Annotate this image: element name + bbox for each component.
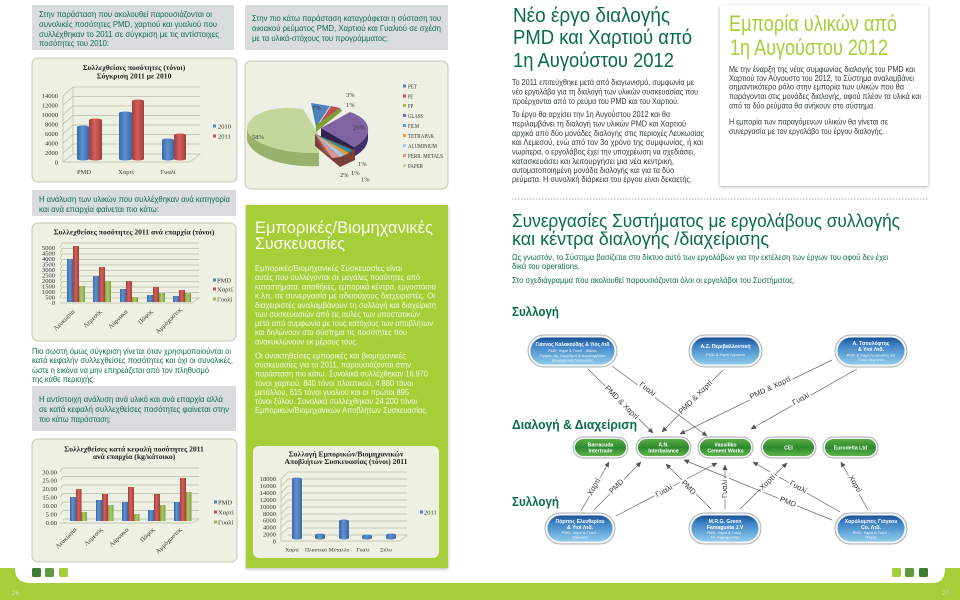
chart: composition pie [245,61,448,189]
chart: collected 2011 by district: 1500 [42,284,55,290]
text block: per capita note: κατά κεφαλήν συλλεχθείσες ποσότητες και όχι οι συνολικές, [32,356,233,365]
heading: system partnerships: Συνεργασίες Συστήματος με εργολάβους συλλογής [512,211,900,231]
chart: collected 2011 by district: 2000 [42,278,55,285]
panel: breakdown intro: και ανά επαρχία φαίνεται πιο κάτω: [39,205,159,214]
body text: παράσταση πιο κάτω. Συνολικά συλλέχθηκαν 16.970 [255,370,429,378]
body text: παράγονται στις μονάδες διαλογής, αφού πλέον τα υλικά και [729,92,921,101]
chart: composition pie: 1% [346,102,355,109]
heading: sorting and management: Διαλογή & Διαχείριση [512,417,637,432]
body text: Χαρτιού τον Αύγουστο του 2012, το Σύστημα αναλαμβάνει [729,74,914,83]
node: Yiangou collector: PMD, Χαρτί & Γυαλί - [853,530,890,535]
node: MRG Green collector: Famagusta J.V [707,525,744,531]
chart: commercial packaging 2011: Ξύλο [380,548,392,554]
text block: new sorting project [512,78,704,184]
panel: breakdown intro: Η ανάλυση των υλικών που συλλέχθηκαν ανά κατηγορία [39,195,230,204]
diagram arrows [581,360,868,520]
panel: stream composition intro [245,5,448,50]
diagram arrows: Χαρτί [847,474,864,494]
chart: commercial packaging 2011: 4000 [263,524,276,532]
text block: new sorting project: νωρίτερα, ο εργολάβος έχει την υποχρέωση να σχεδιάσει, [512,148,695,156]
decorative squares right [892,568,928,577]
chart: composition pie: PP [408,103,413,110]
panel: commercial and industrial packaging [246,205,448,568]
text block: new sorting project: ρεύματα. Η συνολική διάρκεια του έργου είναι δεκαετής. [512,175,692,184]
chart: totals 2011 vs 2010: Συλλεχθείσες ποσότητες (τόνοι) [83,63,186,72]
panel: per capita intro: πιο κάτω παράσταση: [39,415,111,424]
chart: per capita 2011 by district: Λευκωσία [54,526,79,550]
node: Tsoulofti collector: Α. Τσουλόφτης [853,341,890,347]
node: Barracuda sorting centre: Intertrade [589,448,613,454]
diagram arrows: Γυαλί [720,480,729,498]
node: AZ environmental collector: PMD & Χαρτί Λεμεσού [706,352,745,357]
text block: per capita note: της κάθε περιοχής. [32,375,95,384]
diagram arrows: PMD & Χαρτί [603,384,641,421]
panel: intro totals: συνολικές ποσότητες PMD, χαρτιού και γυαλιού που [39,20,217,29]
chart: composition pie: TETRAPAK [408,133,434,140]
body text: αυτές που συλλέγονται σε μεγάλες ποσότητες από [255,273,421,282]
node: Eleftheriou collector: Λάρνακα [572,534,588,540]
chart: totals 2011 vs 2010: Γυαλί [160,169,176,176]
chart: collected 2011 by district [32,223,236,341]
diagram arrows: Γυαλί [654,483,674,499]
chart: collected 2011 by district: Συλλεχθείσες ποσότητες 2011 ανά επαρχία (τόνοι) [54,228,215,236]
chart: commercial packaging 2011: 18000 [260,476,276,483]
decorative squares left [32,568,68,577]
text block: new sorting project: προέρχονται από το ρεύμα του PMD και του Χαρτιού. [512,97,679,106]
node: CEI sorting centre [761,437,816,458]
diagram arrows: Χαρτί [585,476,602,497]
node: Yiangou collector: Co. Λτδ. [861,525,882,531]
diagram arrows: Γυαλί [788,478,809,495]
node: Barracuda sorting centre [573,437,628,458]
chart: per capita 2011 by district: Λεμεσός [83,526,105,548]
heading [255,218,433,253]
text block: per capita note: Πιο σωστή όμως σύγκριση γίνεται όταν χρησιμοποιούνται οι [32,347,231,356]
heading: Εμπορία υλικών από [729,11,897,36]
heading: system partnerships: και κέντρα διαλογής /διαχείρισης [512,229,769,249]
node: MRG Green collector [689,513,761,544]
node: MRG Green collector: M.R.G. Green [709,519,741,525]
panel: per capita intro [32,386,236,431]
chart: collected 2011 by district: Λεμεσός [82,308,104,330]
text block: new sorting project: νέο εργολάβο για τη διαλογή των υλικών συσκευασίας που [512,88,698,96]
chart: per capita 2011 by district: 5.00 [46,512,57,518]
body text: Εμπορικές/Βιομηχανικές Συσκευασίες είναι [255,264,402,273]
chart: composition pie: 1% [361,176,370,184]
chart: composition pie: 3% [346,92,355,99]
node: Kalakoudis collector: PMD, Χαρτί & Γυαλί - Ιδάλιο, [548,348,597,353]
chart: composition pie: 2% [340,172,349,179]
chart: per capita 2011 by district: ανά επαρχία (kg/κάτοικο) [93,452,176,461]
chart: totals 2011 vs 2010: PMD [77,169,91,176]
panel: intro totals: ποσότητες του 2010: [39,39,109,48]
chart: collected 2011 by district: 5000 [42,245,55,252]
node: Vassiliko sorting centre [698,437,753,458]
chart: per capita 2011 by district: 25.00 [42,478,57,484]
chart: totals 2011 vs 2010: 10000 [42,112,58,119]
node: Eurodelta sorting centre: Eurodelta Ltd [834,446,867,452]
chart: totals 2011 vs 2010: 8000 [45,122,58,128]
body text: σημαντικότερο ρόλο στην εμπορία των υλικών που θα [729,82,904,92]
chart: totals 2011 vs 2010: 2010 [218,124,231,130]
heading: system partnerships [512,211,900,249]
heading: new sorting project: PMD και Χαρτιού από [513,26,692,49]
diagram arrows: Γυαλί [791,390,811,407]
chart: per capita 2011 by district: Γυαλί [218,520,234,526]
node: Vassiliko sorting centre: Cement Works [707,448,744,454]
chart: commercial packaging 2011: 2011 [424,510,437,516]
node: AZ environmental collector [689,335,762,367]
node: Vassiliko sorting centre: Vassiliko [714,442,737,448]
diagram arrows: PMD & Χαρτί [748,374,792,401]
node: Kalakoudis collector: Γερμία, Αγ. Βαρβάρα & περιλαμβάνει [540,353,606,358]
diagram arrows: PMD [607,477,626,495]
body text: τόνοι χαρτιού, 840 τόνοι πλαστικού, 4.880 τόνοι [255,379,413,388]
panel: stream composition intro: οικιακού ρεύματος PMD, Χαρτιού και Γυαλιού σε σχέση [252,24,441,33]
body text: των συσκευασιών από τις αυλές των υποστατικών [255,310,420,319]
chart: commercial packaging 2011: Μέταλλο [329,548,350,554]
diagram arrows: Χαρτί [758,472,777,492]
chart: collected 2011 by district: 3000 [42,267,55,274]
text block: new sorting project: Το 2011 επιτεύχθηκε μετά από διαγωνισμό, συμφωνία με [512,78,694,87]
chart: totals 2011 vs 2010: Σύγκριση 2011 με 2010 [97,72,172,80]
text block: new sorting project: αρχικά από δύο μονάδες διαλογής στις περιοχές Λευκωσίας [512,129,704,138]
node: Eleftheriou collector [545,513,615,544]
page number right: 27 [942,591,949,597]
heading: 1η Αυγούστου 2012 [730,35,888,60]
chart: commercial packaging 2011: Χαρτί [285,548,299,554]
chart: composition pie: 7% [312,105,321,112]
chart: per capita 2011 by district: 10.00 [42,503,57,510]
chart: commercial packaging 2011: 0 [273,538,276,546]
chart: commercial packaging 2011: 14000 [260,490,276,497]
chart: collected 2011 by district: 2500 [42,272,55,280]
chart: totals 2011 vs 2010: 0 [55,160,58,166]
node: Barracuda sorting centre: Barracuda [588,442,613,448]
panel: intro totals [32,5,234,50]
chart: per capita 2011 by district: Συλλεχθείσες κατά κεφαλή ποσότητες 2011 [64,444,204,454]
chart: collected 2011 by district: 0 [52,300,55,307]
chart: composition pie: FERR. METALS [408,153,443,160]
heading: Συσκευασίες [255,234,345,253]
chart: commercial packaging 2011: 10000 [260,504,276,511]
node: Yiangou collector [835,513,907,544]
chart: per capita 2011 by district: 15.00 [42,494,57,502]
chart: composition pie: 1% [358,161,367,168]
chart: collected 2011 by district: PMD [217,278,231,284]
text block: partnerships intro: Στο σχεδιάγραμμα που ακολουθεί παρουσιάζονται όλοι οι εργολάβοι του Συστήματος. [512,276,795,285]
diagram arrows: PMD [680,478,698,497]
text block: partnerships intro: Ως γνωστόν, το Σύστημα βασίζεται στο δίκτυο αυτό των εργολάβων για την εκτέλεση των έργων του αφού δεν έχει [512,253,888,262]
chart: collected 2011 by district: Γυαλί [217,296,233,304]
panel: materials trading [720,5,928,186]
diagram arrows: PMD [779,494,798,509]
body text: Οι ανακτηθείσες εμπορικές και βιομηχανικές [255,352,406,360]
body text: και δηλώνουν στο σύστημα τις ποσότητες που [255,328,407,337]
node: Kalakoudis collector [528,335,617,367]
node: Interbalance sorting centre: Α.Ν. [658,442,669,448]
body text: Εμπορικών/Βιομηχανικών Αποβλήτων Συσκευασίας. [255,406,428,415]
chart: totals 2011 vs 2010: 4000 [45,140,58,148]
body text: Η εμπορία των παραγόμενων υλικών θα γίνεται σε [729,118,888,126]
chart: composition pie: PAPER [408,163,424,170]
heading: collection top: Συλλογή [512,304,559,319]
chart: totals 2011 vs 2010: 2011 [218,134,231,140]
body text: διαχειριστές αναλαμβάνουν τη συλλογή και διαχείριση [255,301,436,310]
body text: Με την έναρξη της νέας συμφωνίας διαλογής του PMD και [729,65,915,74]
pie slices [247,103,368,167]
chart: per capita 2011 by district: Πάφος [139,526,157,544]
body text: από τα δύο ρεύματα θα ανήκουν στο σύστημα. [729,102,875,110]
chart: totals 2011 vs 2010: 14000 [42,93,58,100]
chart: collected 2011 by district: Χαρτί [217,286,233,294]
panel: per capita intro: Η αντίστοιχη ανάλυση ανά υλικό και ανά επαρχία αλλά [39,395,223,404]
body text: συσκευασίες για το 2011, παρουσιάζονται στην [255,360,411,370]
panel: stream composition intro: Στην πιο κάτω παράσταση καταγράφεται η σύσταση του [252,14,441,23]
node: MRG Green collector: Ελ. Αμμόχωστος [711,534,739,540]
text block: new sorting project: κατασκευάσει και λειτουργήσει μια νέα κεντρική, [512,157,674,166]
chart: commercial packaging 2011: Γυαλί [356,548,370,554]
chart: composition pie: ALUMINIUM [408,143,437,150]
node: Eleftheriou collector: Πάρπος Ελευθερίου [555,519,605,525]
body text: ανακυκλώνουν εκ μέρους τους. [255,338,358,346]
panel: per capita intro: σε κατά κεφαλή συλλεχθείσες ποσότητες φαίνεται στην [39,405,229,414]
node: Interbalance sorting centre [636,437,691,458]
chart: commercial packaging 2011: Συλλογή Εμπορικών/Βιομηχανικών [289,450,404,458]
chart: collected 2011 by district: Αμμόχωστος [155,306,184,335]
node: Tsoulofti collector: Γυαλί Λεμεσού [858,357,884,362]
chart: composition pie: 1% [351,170,360,177]
text block: per capita note [32,347,233,384]
heading: new sorting project: Νέο έργο διαλογής [513,4,670,27]
diagram arrows: Γυαλί [638,380,658,398]
node: Yiangou collector: Πάφος [865,534,877,540]
chart: per capita 2011 by district [32,439,237,562]
body text: καταστήματα, αποθήκες, εμπορικά κέντρα, εργοστάσια [255,282,436,292]
body text: συνεργασία με τον εργολάβο του έργου διαλογής. [729,127,884,136]
node: Interbalance sorting centre: Interbalance [648,448,679,454]
panel: intro totals: συλλέχθηκαν το 2011 σε σύγκριση με τις αντίστοιχες [39,30,219,39]
node: Eleftheriou collector: & Υιοί Λτδ. [567,525,593,531]
chart: commercial packaging 2011: 6000 [263,518,276,524]
chart: per capita 2011 by district: PMD [218,500,232,506]
chart: composition pie: PET [408,84,417,90]
chart: totals 2011 vs 2010 [32,58,237,182]
heading: new sorting project [513,4,692,72]
node: Eleftheriou collector: PMD, Χαρτί & Γυαλί - [562,530,599,535]
body text [255,264,436,415]
text block: partnerships intro: δικά του operations. [512,262,580,271]
body text [729,65,921,136]
body text: κ.λπ. σε συνεργασία με αδειούχους διαχειριστές. Οι [255,292,435,300]
chart: composition pie: GLASS [408,113,423,120]
chart: commercial packaging 2011: Αποβλήτων Συσκευασίας (τόνοι) 2011 [285,457,408,466]
body text: τόνοι ξύλου. Συνολικά συλλέχθηκαν 24.200 τόνοι [255,397,417,406]
panel: stream composition intro: με τα υλικά-στόχους του προγράμματος: [252,34,388,43]
heading: new sorting project: 1η Αυγούστου 2012 [513,49,674,72]
chart: composition pie: 58% [252,134,264,141]
node: Kalakoudis collector: Βιομηχανική Λευκωσίας [552,358,593,362]
text block: per capita note: ώστε η εικόνα να μην επηρεάζεται από τον πληθυσμό [32,366,209,375]
page number left: 26 [12,591,19,597]
chart: composition pie: 26% [353,124,366,132]
chart: commercial packaging 2011: 12000 [260,497,276,504]
chart: composition pie: PE [408,94,413,100]
chart: commercial packaging 2011: 8000 [263,511,276,518]
node: CEI sorting centre: CEI [784,446,793,452]
chart: per capita 2011 by district: Αμμόχωστος [155,526,184,555]
node: Tsoulofti collector: PMD & Χαρτί Λευκωσίας και [847,352,895,358]
text block: new sorting project: περιλαμβάνει τη διαλογή των υλικών PMD και Χαρτιού [512,120,686,128]
node: Eurodelta sorting centre [823,437,878,458]
chart: commercial packaging 2011: 16000 [260,483,276,490]
body text: μετά από συμφωνία με τους κατόχους των αποβλήτων [255,319,433,328]
chart: collected 2011 by district: Λευκωσία [52,308,77,332]
chart: per capita 2011 by district: Χαρτί [218,510,234,516]
heading: Εμπορικές/Βιομηχανικές [255,218,433,237]
node: AZ environmental collector: Α.Ζ. Περιβαλλοντική [700,344,751,350]
node: Tsoulofti collector: & Υιοί Λτδ. [858,347,884,353]
chart: commercial packaging 2011: 2000 [263,532,276,538]
chart: totals 2011 vs 2010: 12000 [42,102,58,110]
chart: per capita 2011 by district: Λάρνακα [108,526,131,549]
body text: μετάλλου, 615 τόνοι γυαλιού και οι πρώτοι 895 [255,388,410,397]
chart: composition pie: FILM [408,123,419,130]
chart: totals 2011 vs 2010: Χαρτί [118,169,134,176]
text block: partnerships intro [512,253,888,285]
chart: collected 2011 by district: Πάφος [137,308,155,326]
panel: intro totals: Στην παράσταση που ακολουθεί παρουσιάζονται οι [39,10,212,19]
chart: per capita 2011 by district: 0.00 [46,520,57,527]
text block: new sorting project: Το έργο θα αρχίσει την 1η Αυγούστου 2012 και θα [512,110,670,119]
chart: per capita 2011 by district: 20.00 [42,486,57,493]
chart: collected 2011 by district: 1000 [42,289,55,296]
heading: collection bottom: Συλλογή [512,494,559,509]
node: Tsoulofti collector [835,335,907,367]
chart: collected 2011 by district: 4500 [42,250,55,258]
heading [729,11,897,60]
chart: totals 2011 vs 2010: 6000 [45,131,58,138]
chart: totals 2011 vs 2010: 2000 [45,150,58,157]
diagram arrows: PMD & Χαρτί [677,378,714,416]
node: MRG Green collector: PMD, Χαρτί & Γυαλί - [707,530,744,535]
chart: collected 2011 by district: 500 [45,294,55,302]
panel: breakdown intro [32,190,236,216]
node: Yiangou collector: Χαράλαμπος Γιάγκου [845,519,897,525]
chart: collected 2011 by district: Λάρνακα [107,308,130,331]
chart: collected 2011 by district: 4000 [42,256,55,263]
text block: new sorting project: και Λεμεσού, ενώ από τον 3ο χρόνο της συμφωνίας, ή και [512,138,703,147]
chart: commercial packaging 2011: Πλαστικό [305,548,327,554]
footer band [0,568,960,600]
chart: per capita 2011 by district: 30.00 [42,470,57,476]
node: Kalakoudis collector: Γιάννος Καλακούδης & Υιός Λτδ [536,342,610,348]
chart: collected 2011 by district: 3500 [42,262,55,268]
text block: new sorting project: αυτοματοποιημένη μονάδα διαλογής και για τα δύο [512,166,675,175]
chart: commercial packaging 2011 [253,446,439,558]
